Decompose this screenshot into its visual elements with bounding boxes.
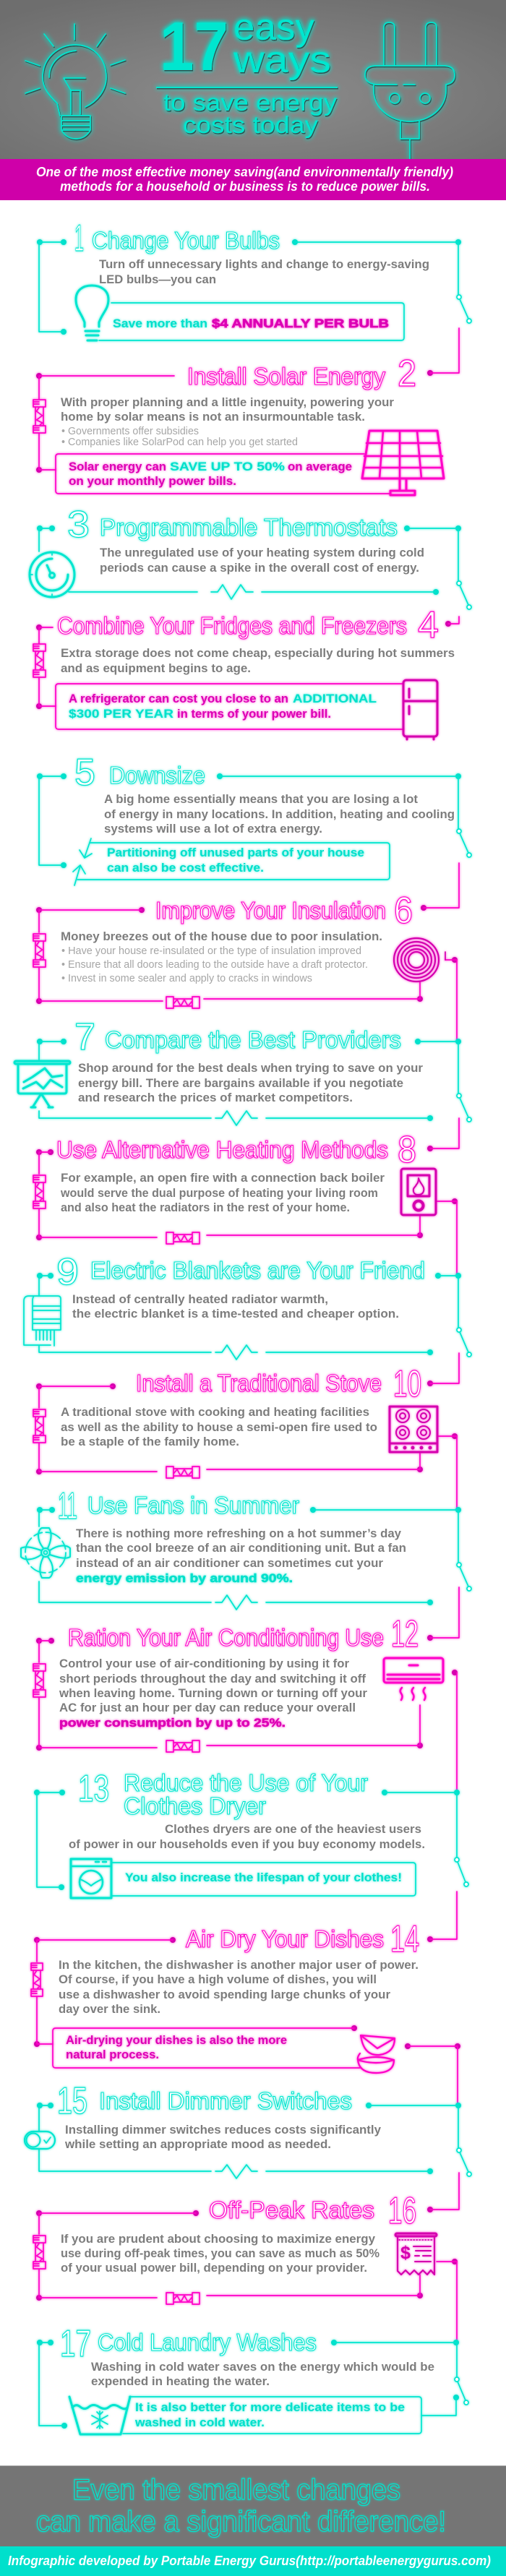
body text: AC for just an hour per day can reduce your overall [59,1701,356,1714]
icon: cold wash tub [69,2397,130,2434]
callout: refrigerator cost: ADDITIONAL [293,692,377,705]
number: 13 [78,1768,109,1810]
footer panel: closing message: can make a significant difference! [36,2506,446,2538]
body text: than the cool breeze of an air conditioning unit. But a fan [76,1541,406,1555]
body text: use a dishwasher to avoid spending large chunks of your [59,1988,390,2001]
heading: Install Dimmer Switches [99,2087,352,2114]
body text: • Invest in some sealer and apply to cracks in windows [61,972,312,984]
wires [37,773,471,868]
number: 14 [390,1918,419,1960]
body text: There is nothing more refreshing on a hot summer’s day [76,1527,402,1540]
callout: clothes lifespan: You also increase the lifespan of your clothes! [125,1871,402,1884]
icon: washing machine [71,1859,111,1898]
section 4: combine fridges and freezers [33,604,459,739]
callout: partitioning: can also be cost effective. [107,861,264,875]
body text: Washing in cold water saves on the energy which would be [91,2360,434,2374]
body text: In the kitchen, the dishwasher is another major user of power. [59,1958,419,1972]
section 1: change your bulbs [37,218,471,340]
intro band: One of the most effective money saving(and environmentally friendly) [36,165,453,179]
section 17: cold laundry washes [37,2323,468,2434]
intro band [0,159,506,200]
body text: systems will use a lot of extra energy. [104,822,322,836]
body text [99,257,429,286]
body text [61,1405,377,1448]
heading: Combine Your Fridges and Freezers [57,612,407,639]
heading: Improve Your Insulation [155,897,386,924]
heading: Install Solar Energy [187,363,385,390]
callout: solar savings [56,454,390,494]
wires [34,1790,468,1890]
callout: partitioning: Partitioning off unused parts of your house [107,846,364,859]
wires [37,1039,471,1125]
heading: Ration Your Air Conditioning Use [68,1624,384,1651]
heading: Use Alternative Heating Methods [56,1136,388,1163]
body text: energy bill. There are bargains available if you negotiate [78,1076,403,1090]
icon: presentation chart [14,1061,70,1107]
icon: thermostat [30,552,74,597]
section 16: off-peak rates [33,2173,459,2343]
wires [33,1118,459,1276]
body text: the electric blanket is a time-tested and cheaper option. [72,1307,399,1321]
wires [31,1892,460,2105]
body text: be a staple of the family home. [61,1435,239,1448]
heading [124,1769,368,1819]
body text: of energy in many locations. In addition, heating and cooling [104,807,455,821]
icon: stove [390,1407,437,1452]
title: 17 easy ways: ways [233,39,331,81]
heading: Change Your Bulbs [92,227,280,254]
section 5: downsize [37,752,471,885]
body text [69,1822,425,1851]
section 3: programmable thermostats [30,504,471,609]
credit band: Infographic developed by Portable Energy Gurus(http://portableenergygurus.com) [8,2554,491,2568]
wires [33,2173,459,2343]
body text: LED bulbs—you can [99,272,216,286]
icon: plug [365,22,455,159]
icon: fridge [403,680,437,739]
callout: air drying: natural process. [66,2048,159,2061]
body text: A big home essentially means that you are losing a lot [104,792,418,806]
body text: For example, an open fire with a connection back boiler [61,1171,385,1185]
body text: instead of an air conditioner can sometimes cut your [76,1556,383,1570]
arrows [73,838,92,885]
body text: when leaving home. Turning down or turning off your [59,1686,367,1700]
title: 17 easy ways [160,7,331,85]
body text: would serve the dual purpose of heating your living room [60,1186,378,1200]
number: 7 [74,1016,95,1058]
callout: delicate items: It is also better for more delicate items to be [135,2400,405,2414]
callout: solar savings: on average [288,460,352,473]
number: 16 [388,2190,416,2232]
icon: dimmer switch [25,2131,55,2149]
body text: Instead of centrally heated radiator warmth, [72,1292,328,1306]
credit band [0,2546,506,2576]
section 13: reduce clothes dryer use [34,1768,468,1898]
number: 3 [67,504,90,546]
wires [33,328,459,473]
section 14: air dry your dishes [31,1892,460,2105]
callout: air drying [53,2028,360,2068]
wires [37,2103,471,2178]
body text [76,1527,406,1585]
wires [37,2340,468,2429]
body text: periods can cause a spike in the overall cost of energy. [100,561,419,575]
body text [78,1061,423,1104]
body text: of your usual power bill, depending on your provider. [61,2261,367,2275]
section 6: improve your insulation [33,863,459,1042]
callout: solar savings: Solar energy can [69,460,166,473]
callout: delicate items [123,2397,421,2434]
callout: partitioning [73,838,390,885]
icon: fan [21,1528,70,1578]
body text: short periods throughout the day and switching it off [59,1672,366,1686]
body text: day over the sink. [59,2002,160,2016]
callout: refrigerator cost [56,684,403,729]
number: 12 [391,1613,419,1655]
body text: energy emission by around 90%. [76,1571,293,1585]
footer panel: closing message [0,2465,506,2546]
body text [64,2123,382,2151]
body text: • Governments offer subsidies [61,425,199,437]
heading: Downsize [109,762,205,789]
body text [72,1292,399,1321]
wires [37,525,471,609]
body text: and also heat the radiators in the rest of your home. [61,1201,350,1214]
callout: save $4: Save more than [113,317,207,330]
body text: If you are prudent about choosing to maximize energy [61,2232,376,2246]
body text: Control your use of air-conditioning by using it for [59,1657,349,1670]
number: 5 [74,752,95,794]
heading: Cold Laundry Washes [98,2329,317,2356]
number: 8 [398,1129,416,1171]
icon: receipt [395,2233,437,2275]
number: 2 [398,353,416,395]
icon: receipt: $ [400,2243,411,2263]
heading: Install a Traditional Stove [136,1370,382,1396]
number: 17 [60,2323,91,2365]
number: 6 [394,890,413,932]
body text [91,2360,434,2388]
body text: Shop around for the best deals when trying to save on your [78,1061,423,1075]
heading: Clothes Dryer [124,1793,266,1819]
heading: Off-Peak Rates [209,2197,374,2223]
icon: bulb [76,285,108,340]
body text [104,792,455,836]
body text [100,546,424,575]
body text: power consumption by up to 25%. [59,1716,286,1730]
callout: solar savings: on your monthly power bills. [69,474,236,488]
body text [61,646,455,675]
body text: of power in our households even if you buy economy models. [69,1837,425,1851]
section 1: change your bulbs: 1 [74,218,84,259]
wires [33,617,459,709]
callout: delicate items: washed in cold water. [134,2416,265,2429]
body text: Installing dimmer switches reduces costs significantly [65,2123,382,2137]
body text [59,1958,419,2016]
icon: air conditioner [384,1658,443,1700]
heading: Reduce the Use of Your [124,1769,368,1796]
wires [33,1587,459,1793]
body text: expended in heating the water. [91,2374,270,2388]
number: 10 [393,1363,421,1405]
title: to save energy costs today: costs today [183,111,319,138]
callout: refrigerator cost: $300 PER YEAR [69,707,173,721]
icon: bowls [358,2035,395,2073]
body text: and as equipment begins to age. [61,661,251,675]
body text: A traditional stove with cooking and heating facilities [61,1405,369,1419]
body text [59,1657,367,1730]
body text: while setting an appropriate mood as needed. [64,2137,331,2151]
body text: • Companies like SolarPod can help you get started [61,436,298,448]
body text [61,395,394,448]
section 2: install solar energy [33,328,459,495]
heading: Electric Blankets are Your Friend [90,1257,425,1284]
icon: boiler [401,1169,436,1215]
intro band: methods for a household or business is to reduce power bills. [60,179,430,194]
callout: save $4: $4 ANNUALLY PER BULB [212,317,389,330]
body text: use during off-peak times, you can save as much as 50% [61,2246,380,2260]
body text: The unregulated use of your heating system during cold [100,546,424,559]
heading: Air Dry Your Dishes [186,1925,384,1952]
number: 4 [418,604,439,646]
callout: refrigerator cost: in terms of your power bill. [177,707,331,721]
body text: Turn off unnecessary lights and change to energy-saving [99,257,429,271]
body text: Clothes dryers are one of the heaviest users [165,1822,421,1836]
section 15: install dimmer switches [25,2080,471,2178]
wires [37,239,471,335]
callout: solar savings: SAVE UP TO 50% [170,460,285,473]
body text [61,929,382,984]
icon: electric blanket [24,1296,61,1346]
section 12: ration air conditioning [33,1587,459,1793]
body text: as well as the ability to house a semi-open fire used to [61,1420,377,1434]
heading: Compare the Best Providers [105,1026,401,1053]
title: to save energy costs today [163,89,338,138]
wires [37,1273,471,1360]
section 9: electric blankets [24,1251,471,1360]
title: 17 easy ways: 17 [160,8,228,85]
body text: With proper planning and a little ingenuity, powering your [61,395,394,409]
number: 15 [57,2080,87,2122]
header panel [0,0,506,159]
number: 9 [56,1251,79,1293]
wires [33,863,459,1042]
section 10: traditional stove [33,1353,459,1510]
title: to save energy costs today: to save energy [163,89,338,116]
body text: • Ensure that all doors leading to the outside have a draft protector. [61,958,368,971]
icon: light bulb [25,24,125,139]
callout: refrigerator cost: A refrigerator can cost you close to an [69,692,288,705]
heading: Use Fans in Summer [87,1492,299,1519]
body text: Money breezes out of the house due to poor insulation. [61,929,382,943]
number: 11 [58,1485,77,1527]
section 11: use fans in summer [21,1485,471,1610]
icon: solar panel [362,431,444,495]
callout: clothes lifespan [111,1863,416,1896]
body text [60,1171,385,1214]
body text: • Have your house re-insulated or the type of insulation improved [61,945,361,957]
footer panel: closing message: Even the smallest changes [72,2474,400,2506]
body text: Extra storage does not come cheap, especially during hot summers [61,646,455,660]
body text [61,2232,380,2275]
callout: save $4 [99,303,404,340]
wires [33,1353,459,1510]
body text: and research the prices of market competitors. [78,1091,353,1104]
body text: Of course, if you have a high volume of dishes, you will [59,1972,377,1986]
title: 17 easy ways: easy [233,7,314,48]
icon: insulation coil [394,938,445,982]
callout: air drying: Air-drying your dishes is also the more [66,2033,287,2047]
wires [37,1507,471,1610]
heading: Programmable Thermostats [100,514,398,541]
section 7: compare the best providers [14,1016,471,1125]
section 8: alternative heating methods [33,1118,459,1276]
body text: home by solar means is not an insurmountable task. [61,410,365,424]
